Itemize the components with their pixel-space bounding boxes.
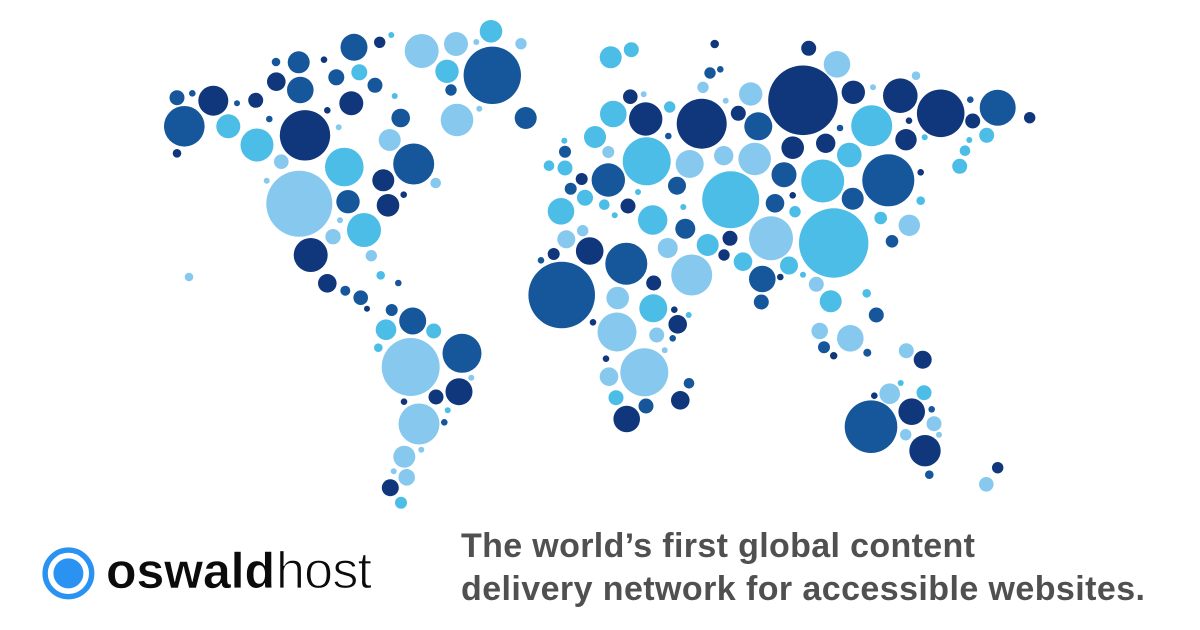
icon: ring and dot: [45, 550, 92, 597]
dots: Europe and western Asia: [544, 40, 772, 271]
dots: Asia: [749, 41, 1035, 312]
dots: Africa: [528, 237, 712, 432]
dots: North America: [164, 32, 441, 281]
world map made of dots: [164, 20, 1035, 509]
wordmark: host: host: [276, 542, 373, 600]
dots: Greenland: [405, 20, 537, 136]
tagline line 1: The world’s first global content: [461, 527, 975, 565]
tagline: [461, 527, 1145, 608]
dots: Southeast Asia and Australia: [811, 289, 1003, 492]
tagline line 2: delivery network for accessible websites.: [461, 570, 1145, 608]
wordmark: oswald: oswald: [106, 543, 275, 599]
logo: oswaldhost: [45, 542, 373, 600]
dots: South America: [318, 271, 482, 509]
